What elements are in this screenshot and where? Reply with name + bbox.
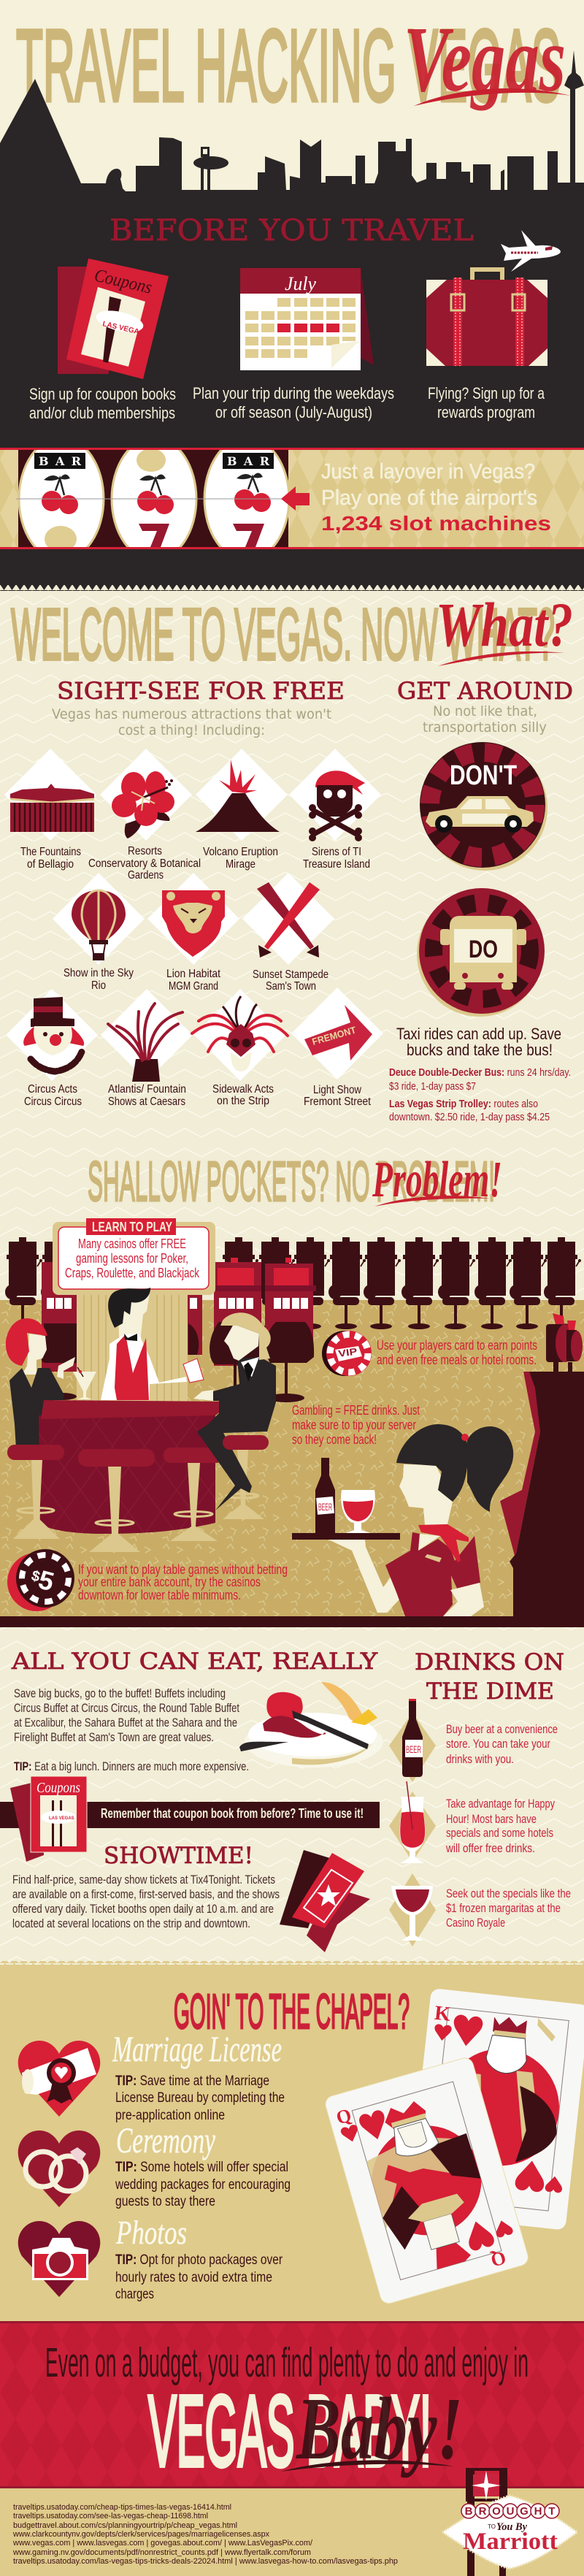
text: players card: and even free meals or hotel rooms. <box>377 1353 537 1367</box>
label: Sirens of TI: Treasure Island <box>303 858 370 871</box>
icon: heart with rings <box>18 2130 100 2207</box>
icon: hot-air balloon <box>72 890 126 960</box>
heading: showtime: SHOWTIME! <box>104 1843 253 1869</box>
text: happy hour: Hour! Most bars have <box>446 1812 537 1826</box>
panel: slot machine band <box>0 448 584 549</box>
icon: beer bottle in diamond <box>389 1699 436 1782</box>
label: Sidewalk Acts: on the Strip <box>217 1095 269 1107</box>
label: Light Show: Fremont Street <box>304 1096 371 1108</box>
icon: don't take a taxi: DON'T <box>450 760 517 791</box>
label: Circus Acts: Circus Circus <box>24 1096 82 1108</box>
text: show tickets: Find half-price, same-day show tickets at Tix4Tonight. Tickets <box>12 1873 275 1887</box>
icon: margarita in diamond <box>389 1873 436 1946</box>
slot reels: BAR <box>39 454 82 468</box>
text: players card <box>377 1338 537 1367</box>
caption: rewards <box>428 384 545 421</box>
label: Circus Acts <box>24 1083 82 1108</box>
text: photos: TIP: Opt for photo packages over <box>115 2252 283 2268</box>
text: sources: www.gaming.nv.gov/documents/pdf/nonrestrict_counts.pdf | www.flyertalk.com/forum <box>12 2548 311 2557</box>
background: footer tan <box>0 2488 584 2576</box>
text: sources: traveltips.usatoday.com/see-las-vegas-cheap-11698.html <box>13 2512 208 2520</box>
heading: get around: transportation silly <box>423 719 547 735</box>
text: table minimums: your entire bank account, try the casinos <box>78 1575 261 1589</box>
text: show tickets: offered vary daily. Ticket booths open daily at 10 a.m. and are <box>12 1902 274 1916</box>
callout: learn to play: Many casinos offer FREE <box>78 1237 186 1251</box>
background: chevron section welcome <box>0 584 584 1307</box>
label: Circus Acts: Circus Acts <box>28 1083 77 1096</box>
text: players card: Use your players card to earn points <box>377 1338 537 1353</box>
zigzag edge <box>0 1961 584 1965</box>
background: casino floor <box>0 1300 584 1617</box>
logo: Marriott Las Vegas sign: TO <box>488 2523 496 2530</box>
text: photos: hourly rates to avoid extra time <box>115 2270 272 2285</box>
callout: learn to play: gaming lessons for Poker, <box>76 1251 188 1266</box>
text: ceremony: TIP: Some hotels will offer special <box>115 2160 288 2175</box>
icon: coupon book small <box>10 1776 87 1862</box>
caption: calendar <box>193 384 394 421</box>
label: Atlantis: Shows at Caesars <box>108 1096 185 1108</box>
label: Resorts: Gardens <box>128 869 164 882</box>
background: chevron food section <box>0 1627 584 1965</box>
playing card: queen: Q <box>488 2247 509 2271</box>
icon: beer on tray <box>315 1458 335 1533</box>
illustration: seated man <box>193 1312 276 1510</box>
logo: Marriott Las Vegas sign: B <box>465 2505 473 2518</box>
icon: VIP chip: VIP <box>337 1345 358 1359</box>
icon: beer on tray: BEER <box>318 1501 332 1513</box>
divider band <box>0 1616 584 1627</box>
playing card: king <box>407 1988 584 2231</box>
label: Sidewalk Acts <box>212 1083 274 1107</box>
callout: learn to play: Craps, Roulette, and Blackjack <box>65 1266 200 1280</box>
icon: beer bottle in diamond: BEER <box>406 1743 421 1755</box>
heading: Before you travel: BEFORE YOU TRAVEL <box>110 214 474 248</box>
label: Volcano: Volcano Eruption <box>203 846 278 858</box>
text: buffets <box>14 1686 249 1773</box>
text: photos <box>115 2214 283 2302</box>
text: buffets: TIP: Eat a big lunch. Dinners are much more expensive. <box>14 1759 249 1773</box>
text: ceremony: wedding packages for encouraging <box>115 2177 291 2193</box>
label: Light Show <box>304 1084 371 1108</box>
label: Sunset Stampede: Sunset Stampede <box>253 968 328 981</box>
caption: rewards: rewards program <box>437 403 535 421</box>
heading: get around: GET AROUND <box>397 677 573 705</box>
slot reels <box>18 450 290 547</box>
text: ceremony <box>115 2120 291 2209</box>
label: Sunset Stampede <box>253 968 328 993</box>
text: free drinks <box>292 1403 420 1447</box>
icon: coupon book: LAS VEGAS <box>101 320 145 337</box>
text: sources: www.vegas.com | www.lasvegas.com | govegas.about.com/ | www.LasVegasPix.com/ <box>12 2539 313 2548</box>
callout: coupon reminder: Remember that coupon book from before? Time to use it! <box>101 1806 364 1821</box>
icon: $5 chip <box>7 1549 74 1611</box>
playing card: queen <box>323 2056 530 2306</box>
text: table minimums: If you want to play table games without betting <box>78 1562 288 1577</box>
icon: calendar: July <box>285 273 316 294</box>
callout: coupon reminder <box>0 1776 380 1862</box>
icon: crossed bats <box>257 882 320 958</box>
icon: lion <box>162 890 225 957</box>
label: Sidewalk Acts: Sidewalk Acts <box>212 1083 274 1096</box>
text: taxi and bus tips: Las Vegas Strip Trolley: routes also <box>389 1098 538 1110</box>
icon: heart with camera <box>18 2221 100 2297</box>
text: sources <box>12 2503 398 2566</box>
icon: hibiscus <box>112 771 174 838</box>
label: Sunset Stampede: Sam's Town <box>266 980 316 993</box>
icon: Atlantis fountain <box>108 1004 182 1082</box>
caption: coupons <box>29 385 176 422</box>
heading: shallow pockets: Problem! <box>372 1152 502 1208</box>
icon: coupon book small: LAS VEGAS <box>49 1816 74 1821</box>
text: sources: www.clarkcountynv.gov/depts/clerk/services/pages/marriagelicenses.aspx <box>12 2530 269 2539</box>
text: taxi and bus tips: Deuce Double-Decker Bus: runs 24 hrs/day. <box>389 1066 571 1079</box>
caption: coupons: and/or club memberships <box>29 404 175 422</box>
text: table minimums: downtown for lower table minimums. <box>78 1588 241 1602</box>
icon: Bellagio <box>10 784 94 832</box>
caption: calendar: or off season (July-August) <box>215 403 372 421</box>
logo: Marriott Las Vegas sign: R <box>479 2505 487 2518</box>
icon: VIP chip <box>322 1331 372 1376</box>
text: ceremony: guests to stay there <box>115 2194 215 2209</box>
label: Bellagio: of Bellagio <box>27 858 74 871</box>
slot machines row <box>42 1258 316 1402</box>
callout: slot machines: Play one of the airport's <box>321 486 537 510</box>
logo: Marriott Las Vegas sign: You By <box>496 2521 527 2533</box>
icon: heart with marriage license <box>18 2041 100 2117</box>
callout: learn to play: LEARN TO PLAY <box>92 1220 172 1234</box>
background: tan chapel section <box>0 1965 584 2323</box>
icon: showgirl <box>192 996 288 1071</box>
text: show tickets <box>12 1873 280 1930</box>
icon: coupon book <box>58 259 169 379</box>
text: ceremony: Ceremony <box>116 2120 216 2160</box>
icon: beer taps <box>546 1313 583 1372</box>
label: Sirens of TI: Sirens of TI <box>312 846 361 858</box>
bar and curtain <box>500 1313 584 1617</box>
text: happy hour <box>445 1797 555 1855</box>
text: sources: traveltips.usatoday.com/cheap-tips-times-las-vegas-16414.html <box>13 2503 231 2512</box>
logo: Marriott Las Vegas sign: G <box>520 2505 529 2518</box>
icon: coupon book small: Coupons <box>36 1780 80 1796</box>
label: Lion Habitat: Lion Habitat <box>166 968 220 980</box>
label: Resorts: Resorts <box>128 845 162 857</box>
text: marriage license: pre-application online <box>115 2108 225 2123</box>
heading: drinks on the dime: DRINKS ON <box>415 1649 564 1675</box>
callout: learn to play <box>53 1218 215 1295</box>
icon: suitcase and plane <box>426 230 561 366</box>
text: marriage license: License Bureau by completing the <box>115 2090 285 2106</box>
text: buffets: at Excalibur, the Sahara Buffet at the Sahara and the <box>14 1716 237 1730</box>
table <box>39 1367 234 1534</box>
back row of chairs <box>5 1237 581 1329</box>
icon: Fremont arrow: FREMONT <box>311 1024 357 1047</box>
text: free drinks: so they come back! <box>292 1432 377 1447</box>
logo: Marriott Las Vegas sign: Marriott <box>463 2529 558 2555</box>
text: buffets: Save big bucks, go to the buffet! Buffets including <box>14 1686 226 1700</box>
text: convenience store: store. You can take your <box>446 1737 550 1751</box>
label: Bellagio: The Fountains <box>20 846 81 858</box>
logo: Marriott Las Vegas sign: O <box>492 2505 501 2518</box>
text: taxi and bus tips: $3 ride, 1-day pass $7 <box>389 1080 476 1093</box>
illustration: seated woman <box>6 1318 131 1508</box>
text: buffets: Firelight Buffet at Sam's Town are great values. <box>14 1730 214 1744</box>
panel: red banner <box>0 2321 584 2488</box>
text: free drinks: make sure to tip your server <box>292 1418 416 1432</box>
text: taxi and bus tips <box>389 1025 571 1123</box>
callout: slot machines: 1,234 slot machines <box>321 512 551 535</box>
bar stools <box>7 1445 264 1552</box>
skyline and dark panel <box>0 50 584 585</box>
text: show tickets: are available on a first-come, first-served basis, and the shows <box>12 1887 280 1901</box>
icon: do take the bus: DO <box>469 936 498 963</box>
icon: $5 chip: $ <box>30 1567 42 1586</box>
heading: sight-see for free: SIGHT-SEE FOR FREE <box>57 677 345 705</box>
heading: all you can eat: ALL YOU CAN EAT, REALLY <box>11 1648 378 1675</box>
text: table minimums <box>78 1562 288 1602</box>
label: Resorts: Conservatory & Botanical <box>88 857 201 870</box>
icon: tickets <box>280 1850 370 1952</box>
text: sources: traveltips.usatoday.com/las-vegas-tips-tricks-deals-22024.html | www.lasvegas-how-to.com/lasvegas-tips.php <box>13 2557 398 2566</box>
logo: Marriott Las Vegas sign: U <box>507 2505 514 2518</box>
white diamonds behind attractions <box>4 749 383 1081</box>
heading: sight-see for free: cost a thing! Including: <box>118 722 265 738</box>
icon: don't take a taxi <box>420 742 548 871</box>
heading: drinks on the dime <box>415 1649 564 1705</box>
heading: get around <box>397 677 573 735</box>
icon: $5 chip: 5 <box>35 1564 57 1597</box>
text: marriage license: Marriage License <box>112 2028 282 2069</box>
icon: clown <box>23 997 84 1071</box>
caption: calendar: Plan your trip during the weekdays <box>193 384 394 402</box>
text: marriage license: TIP: Save time at the Marriage <box>115 2074 269 2089</box>
text: happy hour: will offer free drinks. <box>445 1841 535 1855</box>
icon: volcano <box>196 760 280 832</box>
logo: Marriott Las Vegas sign: T <box>548 2505 556 2518</box>
background: top cream <box>0 0 584 292</box>
arrow <box>281 486 310 511</box>
column behind bartender <box>77 1293 188 1402</box>
icon: skull and bandana <box>309 771 365 841</box>
icon: buffet plate <box>239 1682 383 1767</box>
label: Atlantis <box>108 1083 186 1108</box>
label: Lion Habitat <box>166 968 220 993</box>
text: photos: charges <box>115 2287 154 2302</box>
heading: get around: No not like that, <box>433 703 537 719</box>
heading: sight-see for free <box>52 677 345 738</box>
headline: Vegas Baby: Baby! <box>296 2380 463 2478</box>
text: photos: Photos <box>115 2214 187 2251</box>
logo: Marriott Las Vegas sign <box>442 2469 577 2576</box>
label: Show in the Sky: Show in the Sky <box>64 967 134 979</box>
label: Show in the Sky: Rio <box>91 979 106 992</box>
slot reels: BAR <box>227 454 270 468</box>
label: Volcano <box>203 846 278 871</box>
playing card: king: K <box>434 2002 452 2026</box>
icon: calendar <box>240 268 374 370</box>
label: Light Show: Light Show <box>313 1084 361 1096</box>
label: Volcano: Mirage <box>226 858 256 871</box>
text: taxi and bus tips: bucks and take the bus! <box>407 1041 553 1059</box>
logo: Marriott Las Vegas sign: H <box>534 2505 542 2518</box>
text: marriage license <box>112 2028 285 2123</box>
caption: rewards: Flying? Sign up for a <box>428 384 545 402</box>
scalloped edge <box>0 585 584 591</box>
text: convenience store: drinks with you. <box>446 1752 514 1766</box>
label: Atlantis: Atlantis/ Fountain <box>108 1083 186 1096</box>
playing card: queen: Q <box>334 2104 354 2128</box>
text: free drinks: Gambling = FREE drinks. Just <box>292 1403 420 1418</box>
text: happy hour: specials and some hotels <box>446 1826 553 1840</box>
text: convenience store <box>446 1722 558 1766</box>
text: sources: budgettravel.about.com/cs/planningyourtrip/p/cheap_vegas.html <box>13 2521 237 2530</box>
callout: slot machines <box>321 460 551 535</box>
text: show tickets: located at several locations on the strip and downtown. <box>12 1916 250 1930</box>
caption: coupons: Sign up for coupon books <box>29 385 176 403</box>
label: Lion Habitat: MGM Grand <box>169 980 218 993</box>
text: margaritas: Casino Royale <box>446 1916 505 1930</box>
callout: slot machines: Just a layover in Vegas? <box>321 460 535 484</box>
illustration: bartender <box>101 1288 204 1400</box>
text: margaritas <box>446 1887 571 1930</box>
heading: sight-see for free: Vegas has numerous attractions that won't <box>52 706 331 722</box>
text: taxi and bus tips: downtown. $2.50 ride, 1-day pass $4.25 <box>389 1111 550 1123</box>
heading: drinks on the dime: THE DIME <box>426 1678 554 1705</box>
icon: coupon book: Coupons <box>93 266 154 298</box>
label: Resorts <box>88 845 201 882</box>
text: buffets: Circus Buffet at Circus Circus, the Round Table Buffet <box>14 1701 239 1715</box>
label: Bellagio <box>20 846 81 871</box>
illustration: waitress <box>292 1424 513 1616</box>
label: Sirens of TI <box>303 846 370 871</box>
icon: Fremont arrow <box>304 1005 372 1060</box>
icon: martini <box>73 1367 96 1399</box>
icon: do take the bus <box>417 888 545 1017</box>
icon: wine glass <box>341 1490 375 1533</box>
label: Show in the Sky <box>64 967 134 992</box>
icon: hurricane glass in diamond <box>389 1781 436 1863</box>
